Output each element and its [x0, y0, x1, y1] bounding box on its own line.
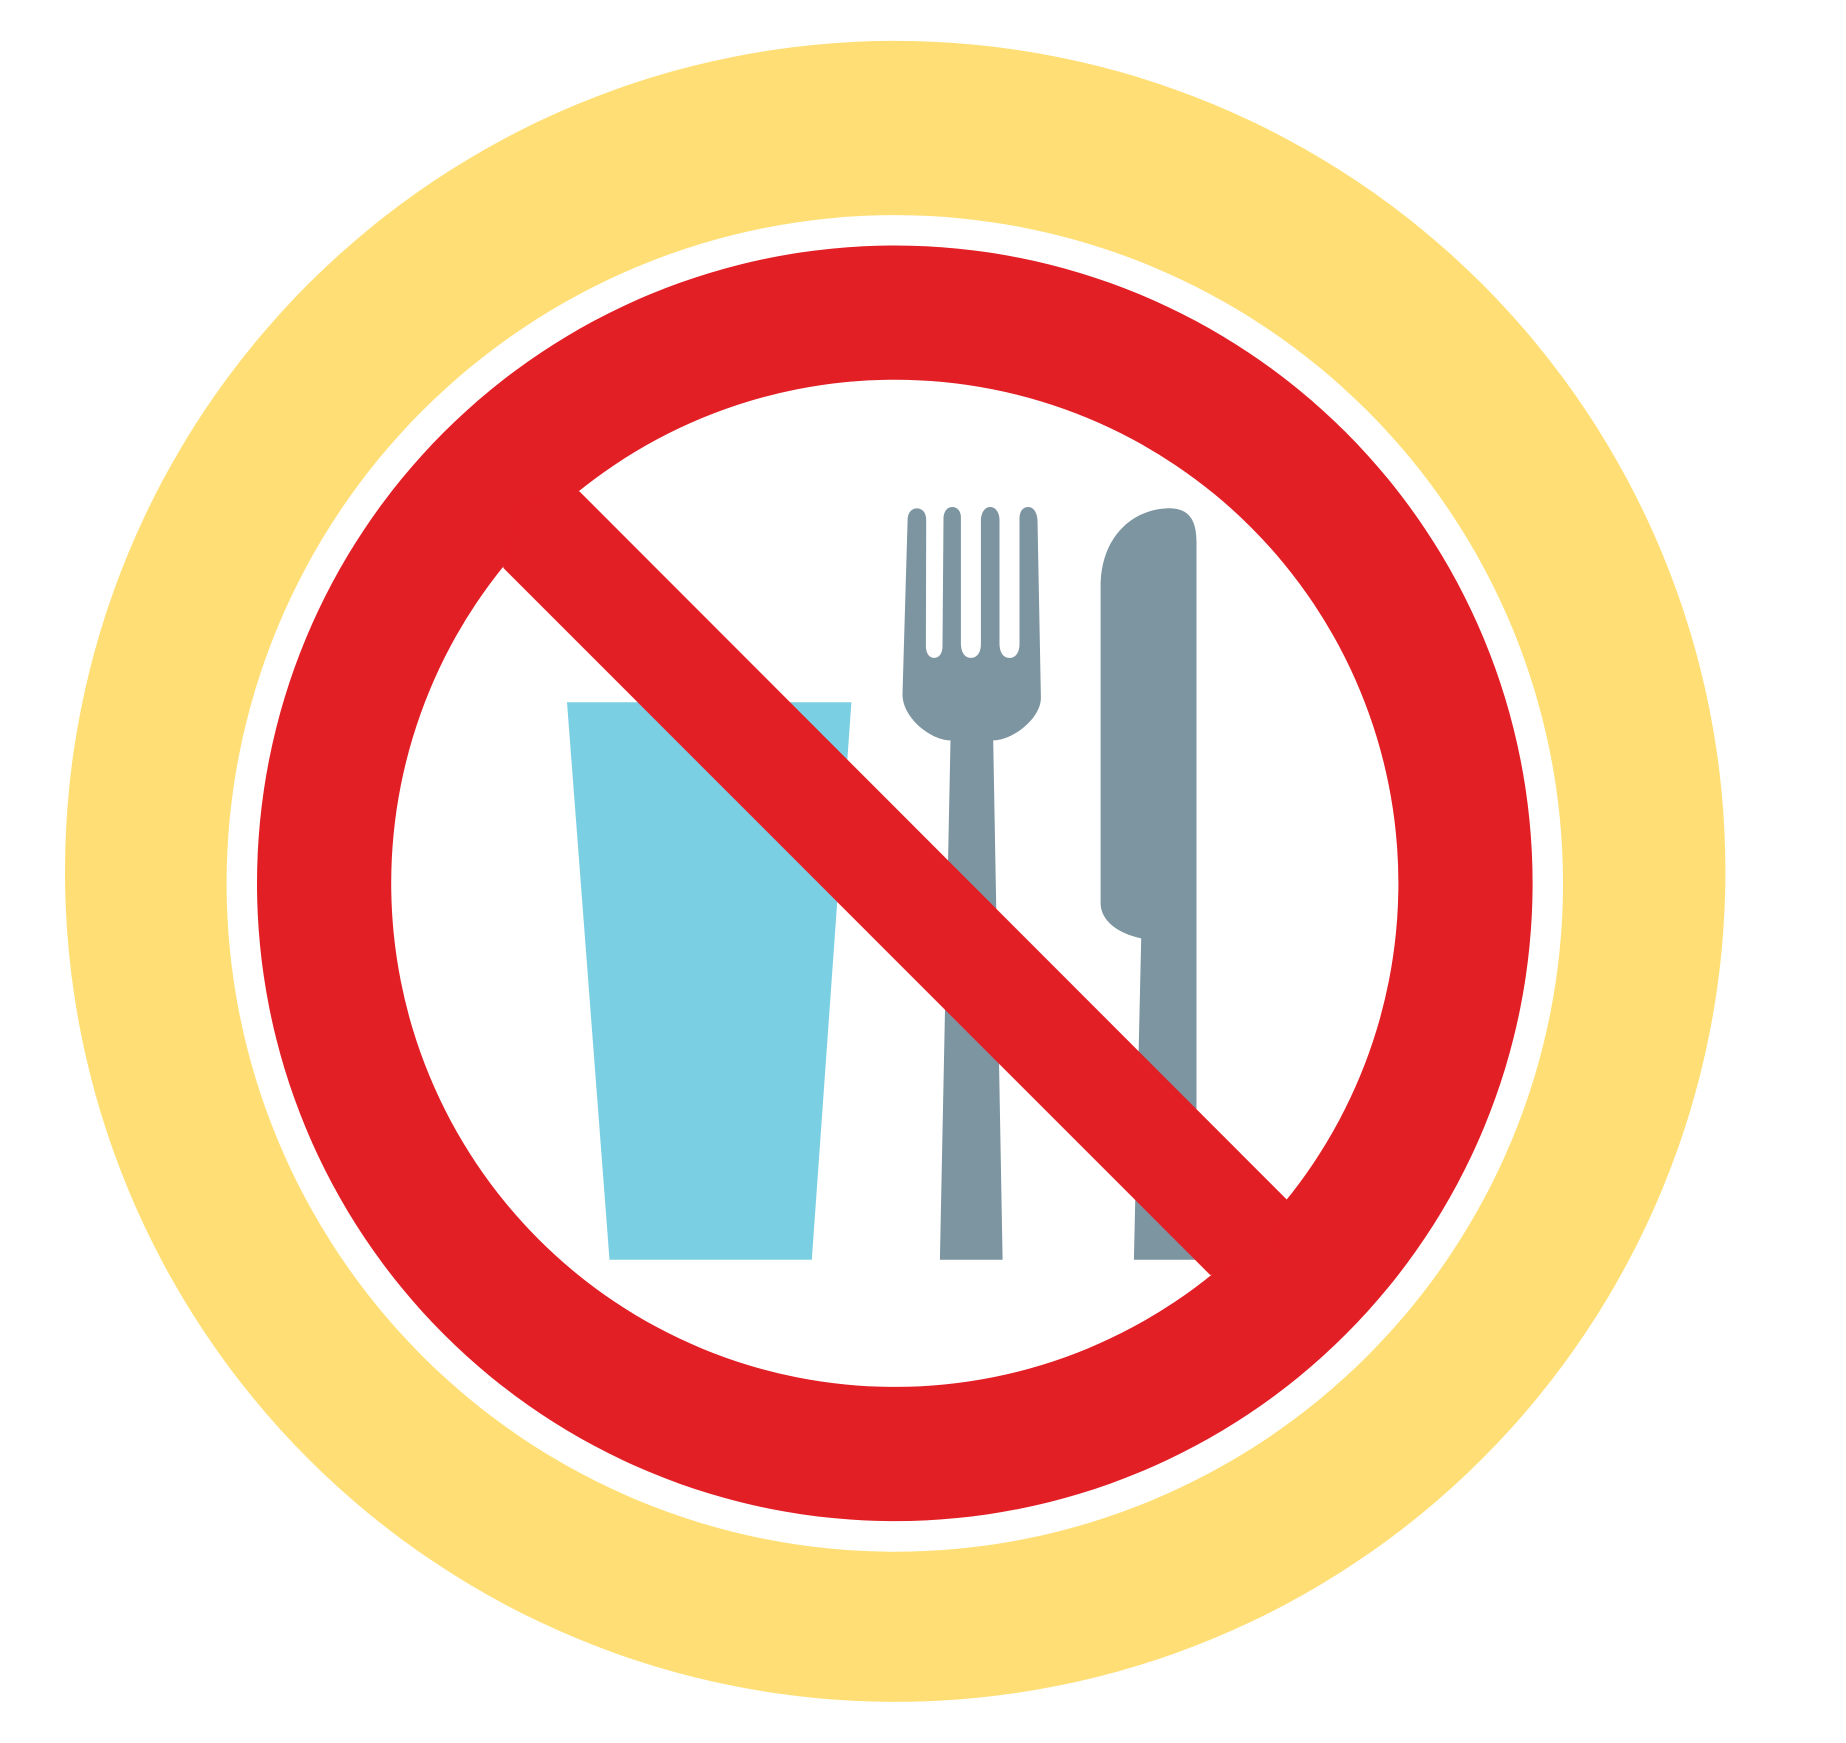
- red prohibition sign: [257, 246, 1533, 1521]
- icon: knife: [1101, 508, 1196, 1260]
- icon: fork: [902, 507, 1041, 1260]
- red ring: [257, 246, 1533, 1521]
- icon: glass: [567, 702, 851, 1260]
- red diagonal bar: [503, 491, 1287, 1275]
